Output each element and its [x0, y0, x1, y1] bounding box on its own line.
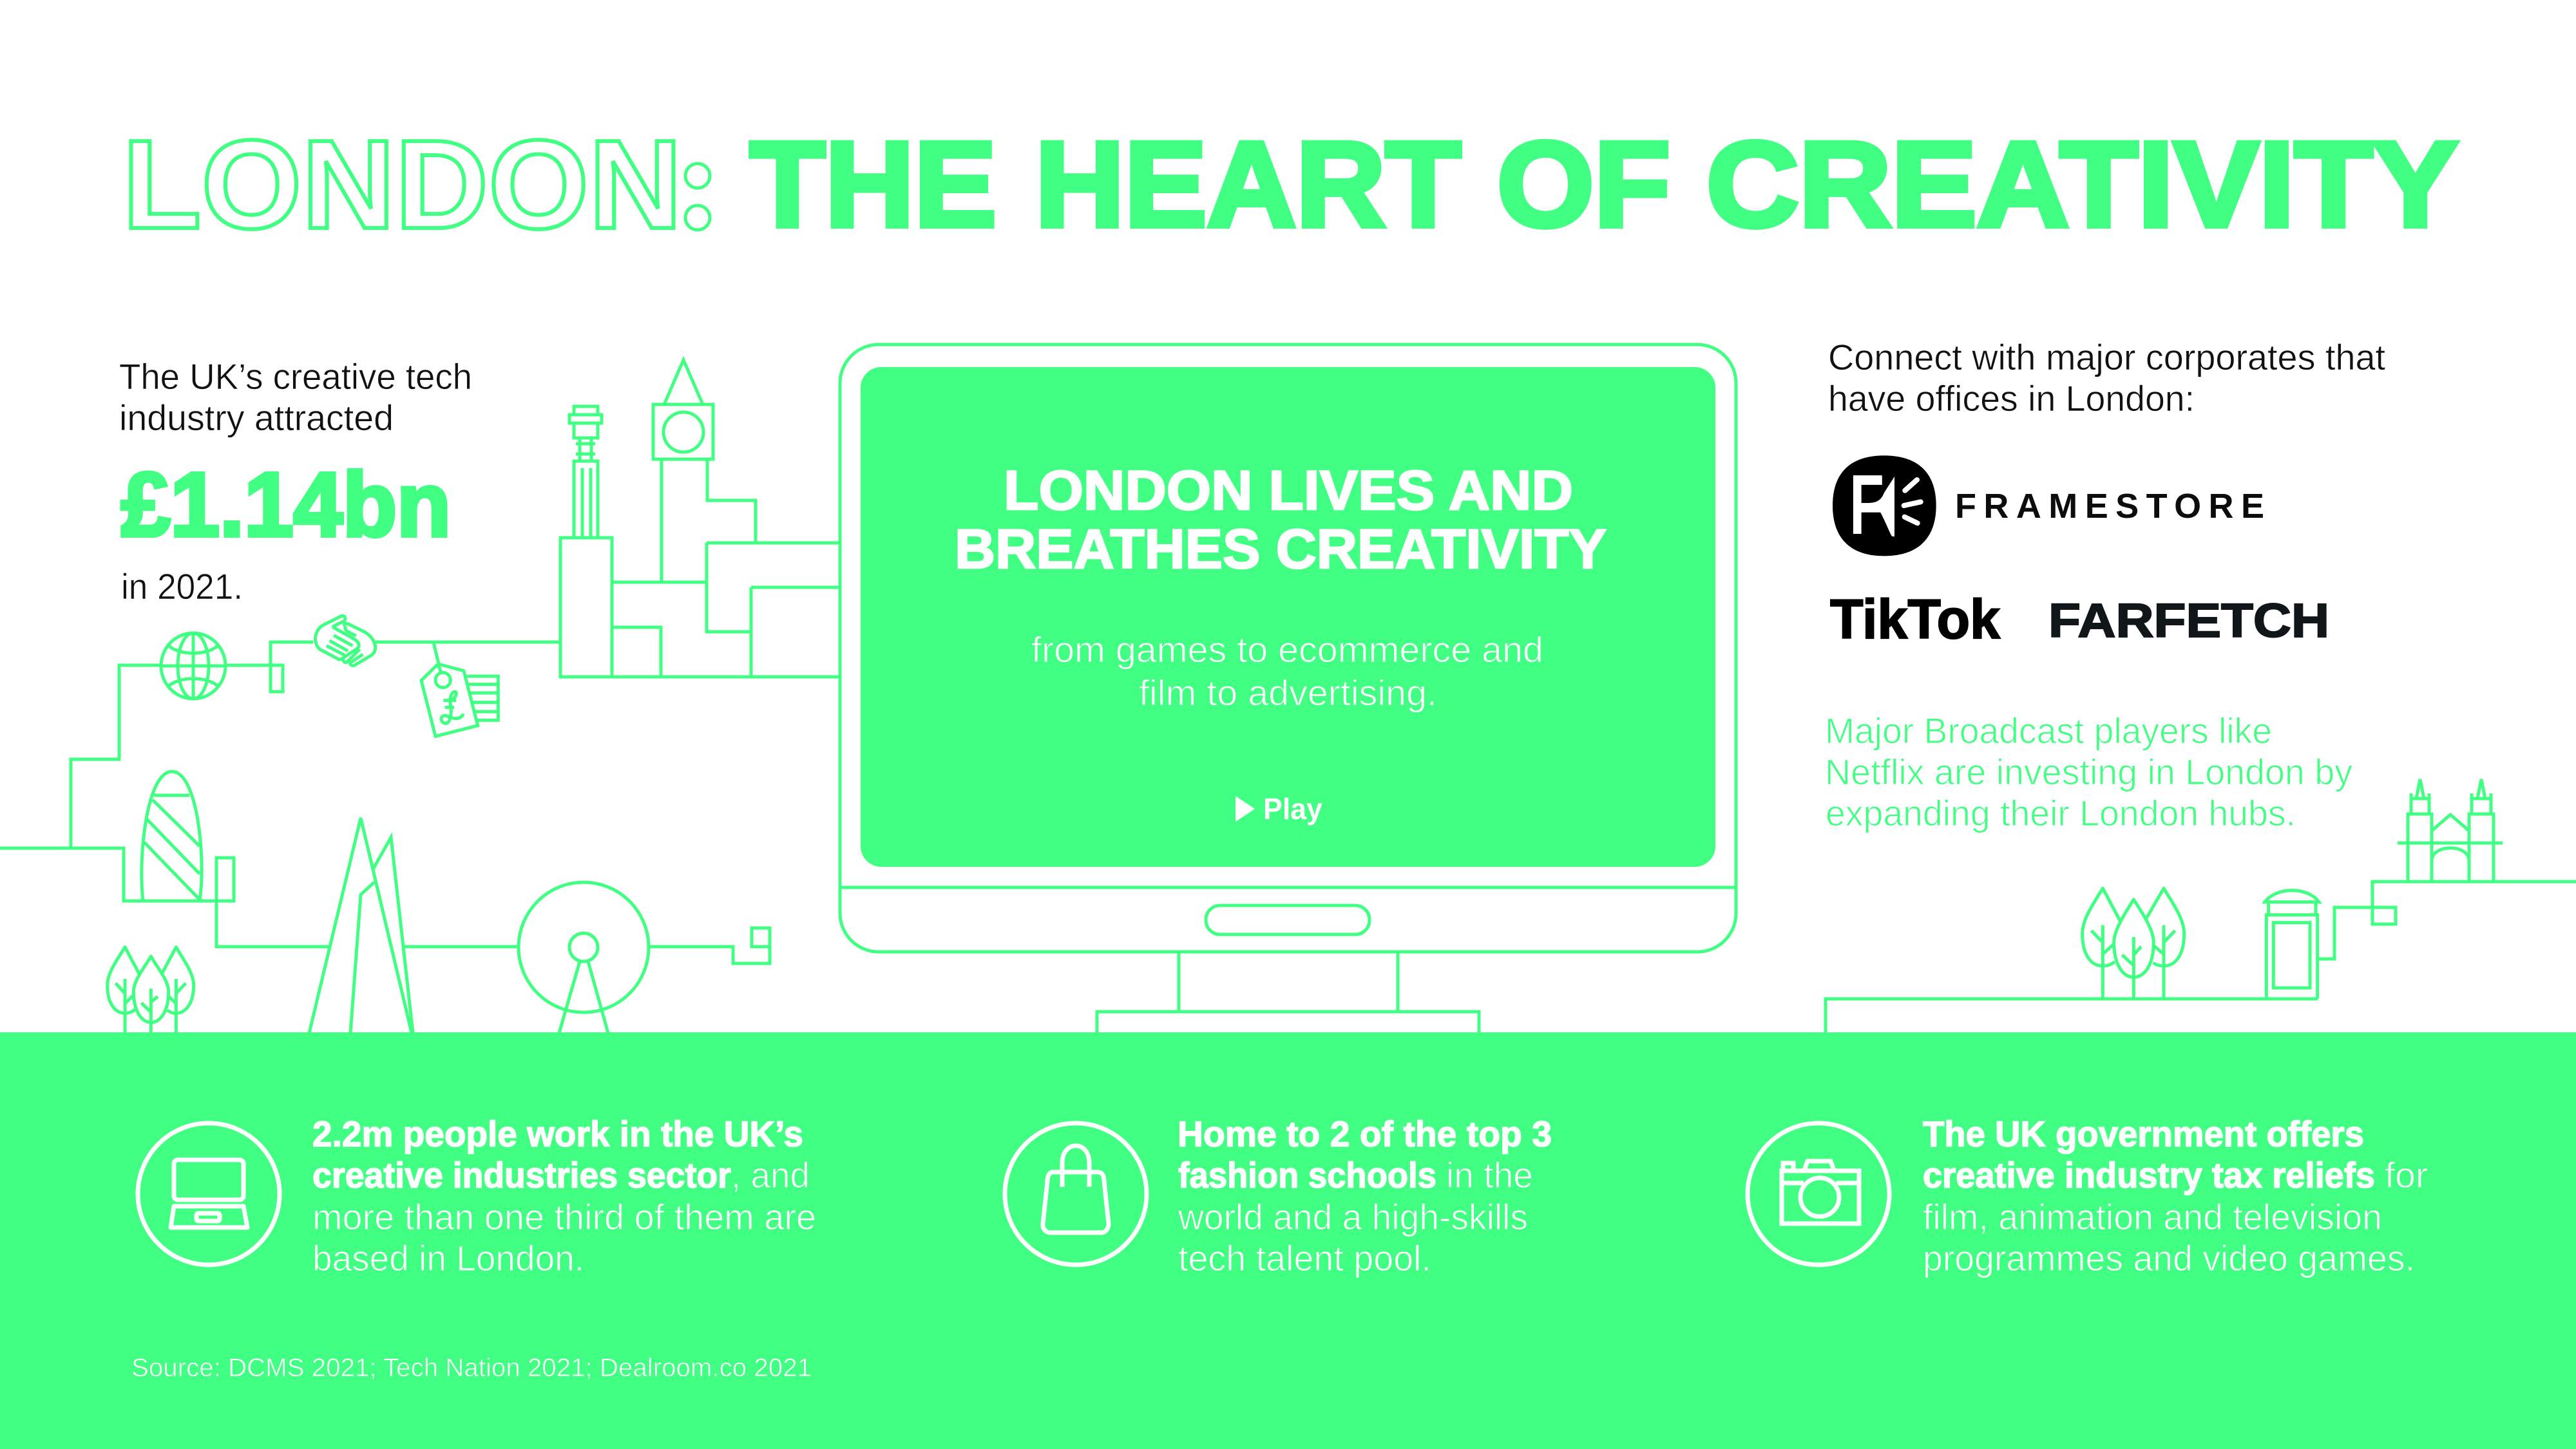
text: fashion: tech talent pool.: [1178, 1238, 1431, 1278]
text: tax: programmes and video games.: [1923, 1238, 2415, 1278]
monitor stand: [1097, 952, 1479, 1033]
source note: Source: DCMS 2021; Tech Nation 2021; Dealroom.co 2021: [131, 1354, 812, 1382]
text: workforce: based in London.: [312, 1238, 584, 1278]
text: tax: film, animation and television: [1923, 1197, 2382, 1237]
text: tax: The UK government offers: [1923, 1113, 2364, 1154]
text: tax: for: [2385, 1155, 2428, 1195]
icon: trees right: [2083, 888, 2184, 999]
icon: telephone box: [2265, 891, 2319, 999]
text block: investment figure: The UK’s creative tech: [119, 356, 472, 397]
icon: Westminster Abbey: [2398, 779, 2503, 882]
title: [122, 114, 2458, 255]
play button: Play: [1263, 792, 1322, 826]
icon: trees left: [108, 947, 194, 1033]
logo: Framestore: FRAMESTORE: [1955, 487, 2264, 526]
panel: green footer band: [0, 1032, 2576, 1449]
panel: fashion schools: [1005, 1113, 1552, 1278]
text: workforce: [312, 1113, 816, 1278]
text: tax: [1923, 1113, 2428, 1278]
logo: Framestore: F: [1849, 457, 1884, 552]
text: workforce: 2.2m people work in the UK’s: [312, 1113, 803, 1154]
icon: London Eye: [519, 882, 649, 1033]
text: tax: creative industry tax reliefs: [1923, 1155, 2375, 1195]
monitor screen: [861, 367, 1715, 867]
circuit lines: right illustration: [1826, 882, 2576, 1033]
icon: BT Tower: [569, 406, 602, 538]
logo: Framestore: [1833, 455, 2264, 556]
text: workforce: , and: [731, 1155, 810, 1195]
icon: handshake: [316, 616, 376, 666]
logo: Farfetch: FARFETCH: [2048, 594, 2329, 647]
text: fashion: [1178, 1113, 1552, 1278]
monitor button: [1206, 905, 1369, 934]
icon: laptop: [138, 1123, 280, 1265]
panel: tax reliefs: [1748, 1113, 2428, 1278]
title: CREATIVITY: [1706, 117, 2458, 252]
title: THE: [750, 117, 997, 252]
panel: creative workforce: [138, 1113, 816, 1278]
text: fashion: Home to 2 of the top 3: [1178, 1113, 1552, 1154]
icon: shopping bag: [1005, 1123, 1147, 1265]
text: fashion: in the: [1446, 1155, 1533, 1195]
icon: Gherkin: [142, 772, 202, 901]
text block: investment figure: in 2021.: [121, 566, 243, 607]
text: workforce: creative industries sector: [312, 1155, 731, 1195]
text block: broadcast players: Major Broadcast players like: [1825, 710, 2272, 751]
icon: price tag: [421, 643, 498, 736]
text block: broadcast players: expanding their London hubs.: [1826, 793, 2296, 833]
text block: investment figure: [119, 356, 472, 607]
circuit lines: left illustration: [0, 459, 839, 963]
text block: corporates: Connect with major corporates that: [1828, 337, 2385, 377]
text block: broadcast players: [1825, 710, 2352, 833]
title: LONDON: [122, 114, 682, 255]
text: workforce: more than one third of them are: [312, 1197, 816, 1237]
icon: camera: [1748, 1123, 1889, 1265]
title: OF: [1497, 117, 1670, 252]
monitor screen: from games to ecommerce and: [1031, 629, 1543, 670]
text block: corporates: [1828, 337, 2385, 419]
monitor screen: film to advertising.: [1139, 672, 1437, 713]
play button: [1236, 792, 1322, 826]
monitor screen: LONDON LIVES AND: [1004, 460, 1573, 522]
monitor screen: BREATHES CREATIVITY: [955, 518, 1607, 580]
logo: TikTok: TikTok: [1830, 589, 2000, 650]
title: HEART: [1035, 117, 1461, 252]
text: fashion: fashion schools: [1178, 1155, 1436, 1195]
icon: Big Ben: [653, 360, 713, 459]
panel: monitor: [840, 345, 1736, 1033]
text block: broadcast players: Netflix are investing in London by: [1825, 752, 2352, 792]
icon: globe: [161, 633, 225, 699]
text block: corporates: have offices in London:: [1828, 378, 2195, 419]
stat: £1.14bn: £1.14bn: [121, 453, 451, 555]
text block: investment figure: industry attracted: [119, 397, 394, 438]
text: fashion: world and a high-skills: [1178, 1197, 1528, 1237]
icon: Shard: [309, 818, 413, 1033]
